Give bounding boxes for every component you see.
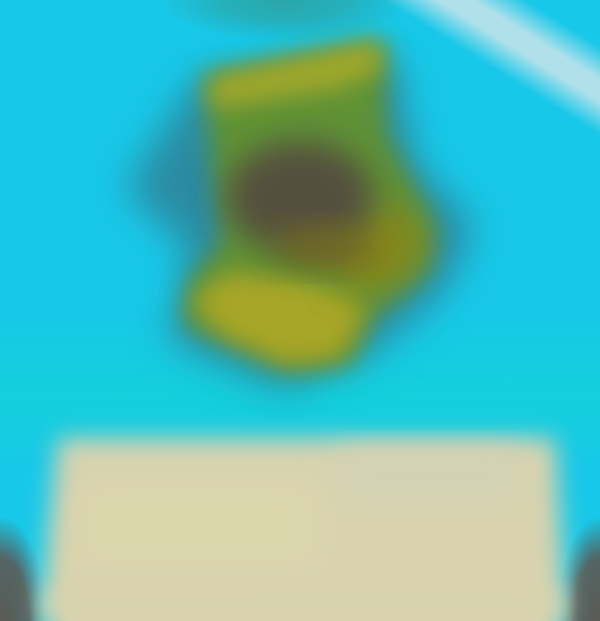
panel: grey tint patch [340, 450, 520, 500]
shadow halo around central figure [125, 55, 475, 390]
figure: right olive shoulder [330, 200, 430, 290]
panel: bottom edge fill [32, 582, 576, 621]
figure: dark brown centre [226, 141, 374, 253]
cream text panel [40, 438, 566, 621]
bottom left dark corner [0, 516, 48, 621]
figure: olive green base [182, 40, 435, 372]
figure: brown lower shade [275, 228, 375, 268]
top teal shadow [160, 0, 410, 42]
figure: lower yellow body [190, 272, 362, 364]
top right highlight streak [380, 0, 600, 150]
background: lower teal band [0, 310, 600, 470]
central figure: olive and yellow body [182, 40, 435, 372]
bottom right dark corner [556, 516, 600, 621]
figure: upper yellow band [208, 40, 382, 108]
panel: yellow tint patch [85, 490, 315, 560]
